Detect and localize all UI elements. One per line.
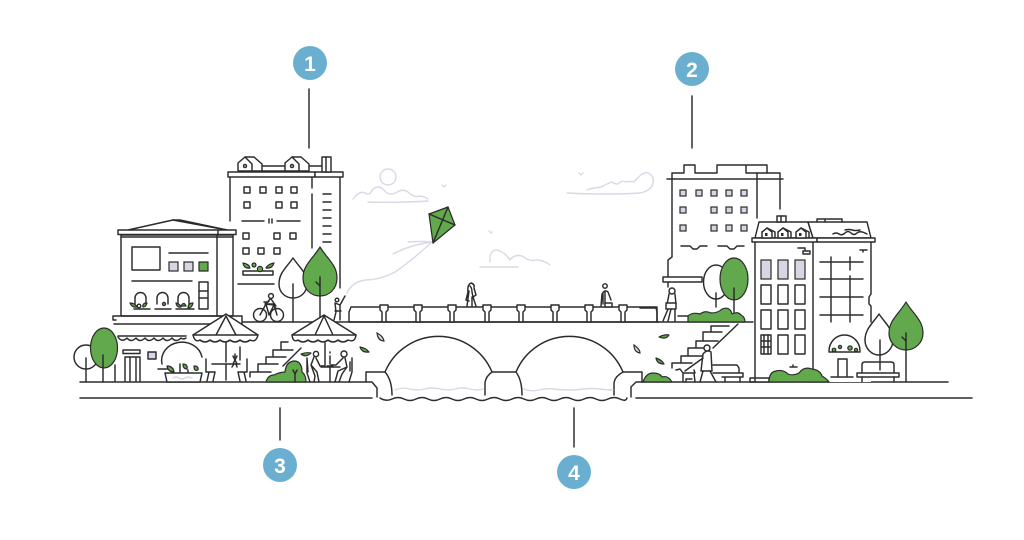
right upper bush [688,308,745,322]
callout 3 [263,408,297,482]
green tree right [889,302,923,382]
bridge arches and piers [366,336,642,395]
woman walking dog [676,345,716,382]
callout 1: 1 [304,53,316,76]
cafe couple at table [307,343,352,382]
lower left trees [74,328,118,382]
trees behind right bush [704,258,748,322]
bridge parapet [349,305,659,322]
green bush by front building [769,368,829,382]
back building windows [680,190,747,231]
museum building [113,220,242,324]
walker on bridge [466,283,476,306]
sun and clouds [353,169,653,267]
bench by stairs [713,365,743,382]
front building windows [761,260,805,354]
green bush left [266,361,306,382]
staircase left [250,342,301,377]
dome window and door [829,335,860,377]
small green bush [643,373,672,382]
bench right [857,362,899,382]
callout 1 [293,46,327,148]
front building right facade grid [820,257,863,322]
domed planter [158,342,202,382]
woman with bag on terrace [640,288,688,322]
tree: green teardrop [303,247,337,322]
callout 3: 3 [274,455,286,478]
back building right [663,165,783,287]
cafe awning and shopfront [115,336,186,381]
callout 2: 2 [686,59,698,82]
river water [380,388,627,400]
ground lines and embankment [80,322,972,398]
white tree right [865,314,893,370]
callout 4 [557,408,591,489]
cafe umbrella 2 [292,315,356,342]
cafe umbrella and table 1 [193,314,258,381]
person flying kite [334,296,345,320]
cyclist [254,294,284,322]
falling leaves [301,333,669,364]
tall building left [228,157,343,288]
kite [429,207,455,243]
staircase right [672,324,738,368]
callout 4: 4 [568,462,580,485]
tree: white teardrop [279,258,307,322]
kite string [347,242,432,293]
callout 2 [675,52,709,148]
man with suitcase [601,284,612,307]
front building right [750,216,875,382]
